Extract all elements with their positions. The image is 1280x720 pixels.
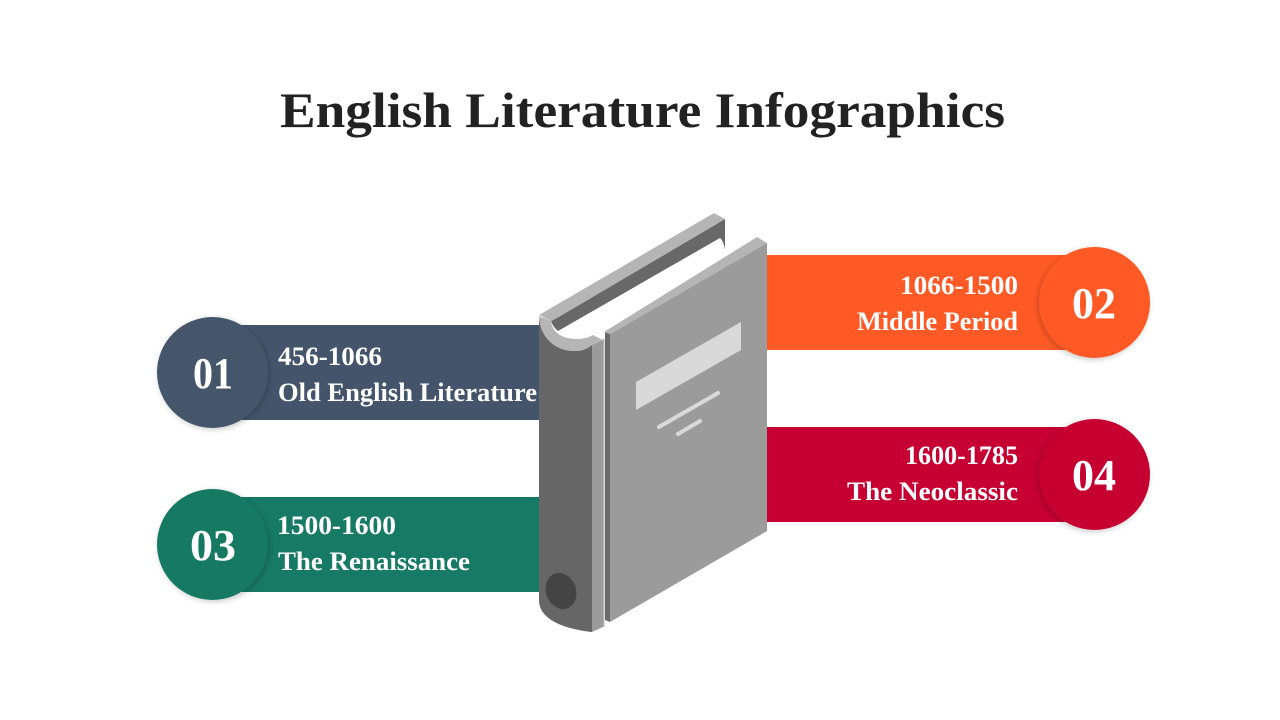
date: 456-1066: 456-1066 <box>278 342 382 371</box>
back cover inner <box>551 219 725 331</box>
label: Middle Period: Middle Period <box>857 307 1019 336</box>
date: 1066-1500: 1066-1500 <box>900 271 1018 300</box>
label: The Renaissance: The Renaissance <box>278 547 470 576</box>
number: 04: 04 <box>1072 451 1116 500</box>
cover inner strip <box>605 332 610 622</box>
cover line 1 <box>659 393 718 427</box>
cover line 2 <box>678 421 700 434</box>
icon: book <box>539 213 767 632</box>
panel: 01 Old English Literature <box>157 317 540 428</box>
panel: 03 The Renaissance <box>157 489 540 600</box>
circle: 03 <box>157 489 268 600</box>
number: 01: 01 <box>193 349 233 398</box>
panel: 02 Middle Period <box>767 247 1150 358</box>
cover label <box>636 322 741 410</box>
number: 03: 03 <box>190 521 236 570</box>
pages <box>556 236 767 346</box>
title: English Literature Infographics <box>280 82 1005 138</box>
front cover <box>610 243 767 622</box>
bar: 02 <box>767 255 1094 350</box>
circle: 01 <box>157 317 268 428</box>
date: 1500-1600: 1500-1600 <box>277 511 396 540</box>
hinge strip <box>592 340 603 632</box>
front cover top edge <box>604 237 767 334</box>
hinge light line <box>603 339 604 627</box>
circle: 04 <box>1039 419 1150 530</box>
panel: 04 The Neoclassic <box>767 419 1150 530</box>
spine hole <box>541 568 581 614</box>
number: 02: 02 <box>1072 279 1116 328</box>
bar: 01 <box>213 325 540 420</box>
date: 1600-1785: 1600-1785 <box>905 441 1018 470</box>
bar: 04 <box>767 427 1094 522</box>
spine <box>539 316 592 632</box>
bar: 03 <box>213 497 540 592</box>
circle: 02 <box>1039 247 1150 358</box>
label: The Neoclassic: The Neoclassic <box>847 477 1018 506</box>
back cover top edge <box>539 213 725 321</box>
label: Old English Literature: Old English Literature <box>278 378 537 407</box>
spine top curve <box>539 316 603 351</box>
